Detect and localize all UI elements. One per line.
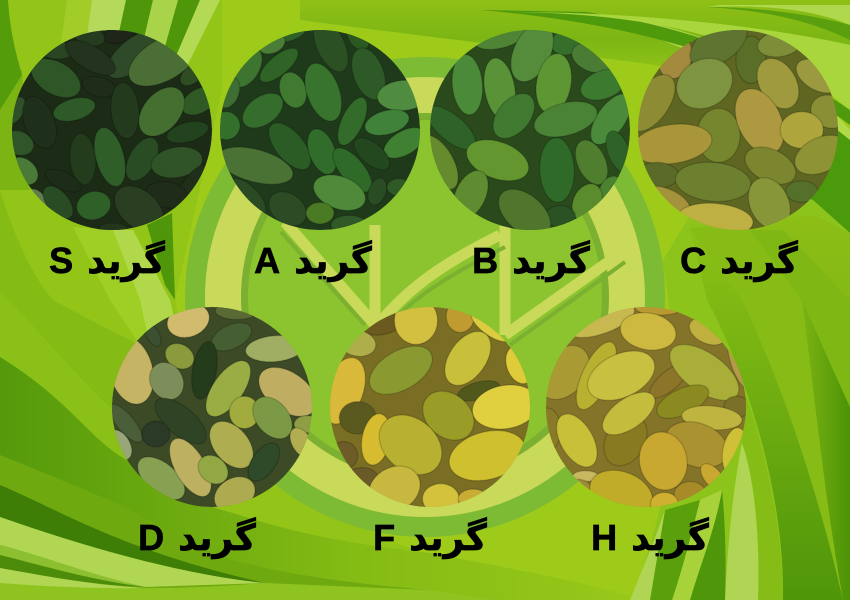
label: grade B: گرید B (472, 240, 590, 282)
grade S (12, 30, 212, 282)
photo: grade H pistachios (546, 307, 746, 507)
lime slice emblem (185, 57, 665, 537)
label: grade F: گرید F (373, 517, 487, 559)
grade B (430, 30, 630, 282)
label: grade S: گرید S (49, 240, 165, 282)
photo: grade S pistachios (12, 30, 212, 230)
photo: grade B pistachios (430, 30, 630, 230)
grade C (638, 30, 838, 282)
photo: grade F pistachios (330, 307, 530, 507)
right swirl bands (480, 5, 850, 600)
label: grade C: گرید C (680, 240, 798, 282)
grade A (220, 30, 420, 282)
grade D (112, 307, 312, 560)
label: grade H: گرید H (591, 517, 709, 559)
photo: grade A pistachios (220, 30, 420, 230)
grade H (546, 307, 746, 560)
photo: grade C pistachios (638, 30, 838, 230)
grade F (330, 307, 530, 560)
label: grade D: گرید D (138, 517, 256, 559)
photo: grade D pistachios (112, 307, 312, 507)
label: grade A: گرید A (254, 240, 372, 282)
